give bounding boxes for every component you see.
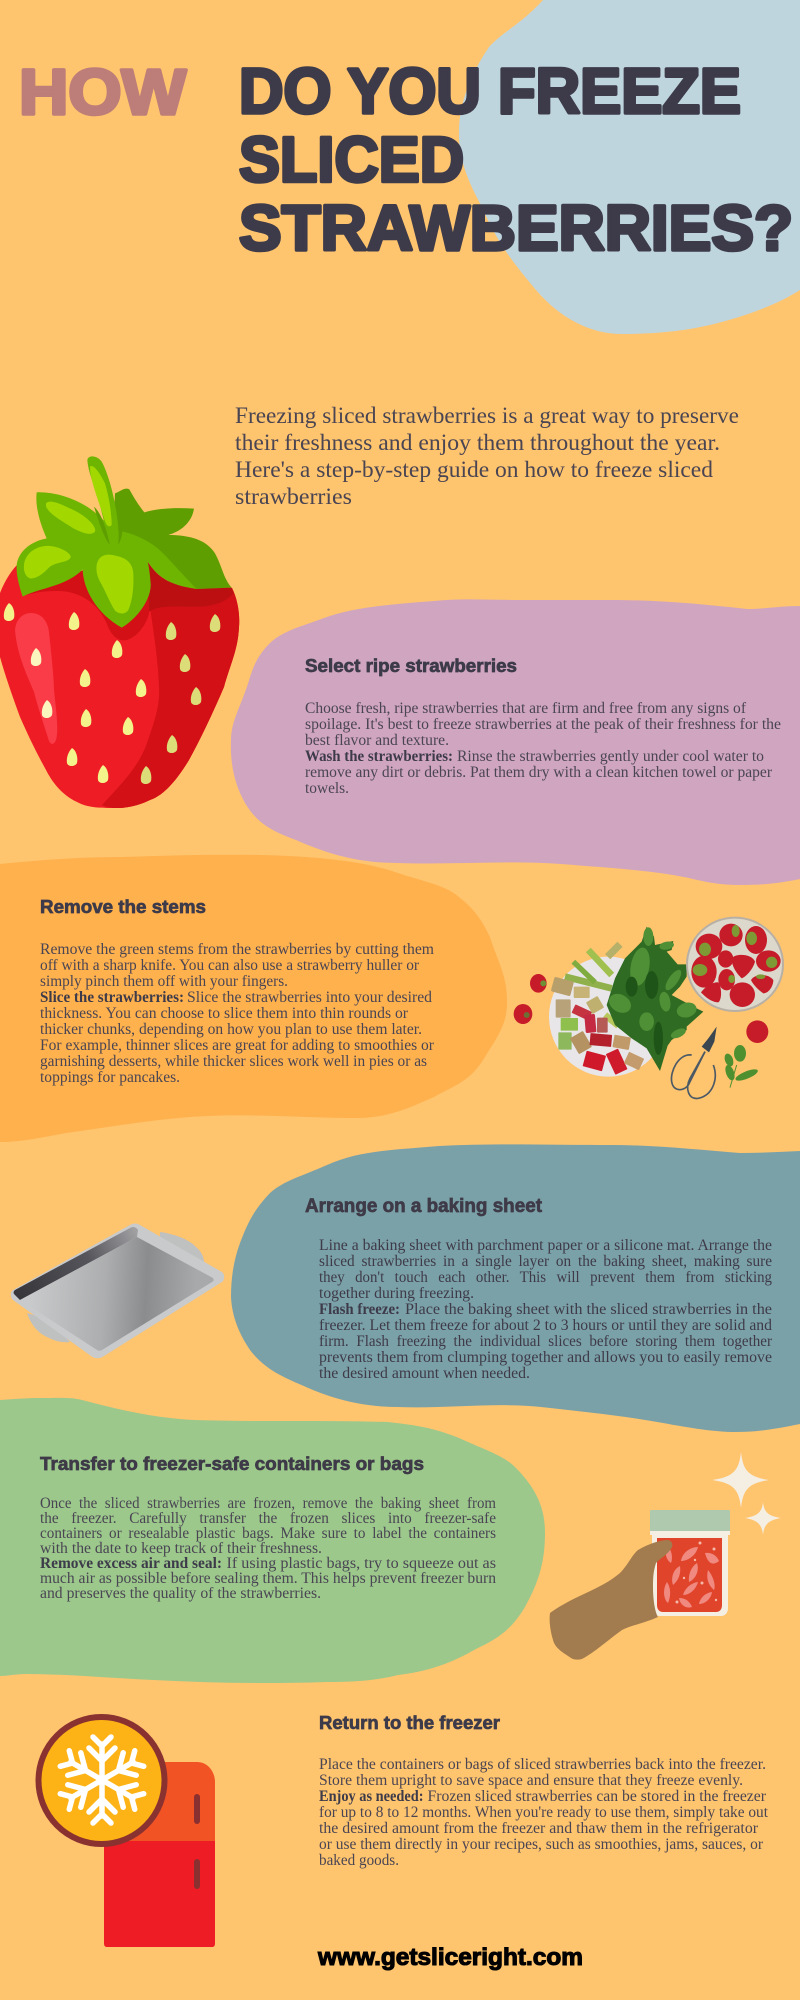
heading: remove the stems: Remove the stems [40, 896, 206, 917]
mint sprig [723, 1045, 759, 1088]
section: return to the freezer [319, 1712, 769, 1869]
intro text [235, 403, 739, 509]
jar lid [650, 1510, 730, 1532]
text block: arrange on a baking sheet: Place the baking sheet with the sliced strawberries in the [405, 1301, 772, 1318]
text block: return to the freezer: Store them upright to save space and ensure that they freeze evenly. [319, 1772, 743, 1789]
fridge handles [194, 1794, 200, 1889]
pan rim [11, 1224, 224, 1358]
text block: transfer to freezer-safe containers: and preserves the quality of the strawberries. [40, 1585, 321, 1602]
text block: transfer to freezer-safe containers: Remove excess air and seal: [40, 1555, 222, 1572]
text block: select ripe strawberries: spoilage. It's best to freeze strawberries at the peak of their freshness for the [305, 716, 781, 733]
shadow under calyx [23, 562, 233, 640]
snowflake badge [38, 1717, 164, 1844]
text block: arrange on a baking sheet: Line a baking sheet with parchment paper or a silicone mat. Arrange the [319, 1237, 772, 1254]
text block: transfer to freezer-safe containers: containers or resealable plastic bags. Make sure to label the containers [40, 1525, 496, 1542]
title: HOW [19, 56, 187, 128]
icon: fridge with snowflake badge [38, 1717, 215, 1947]
icon: baking sheet [11, 1224, 224, 1358]
pan floor [20, 1237, 214, 1351]
text block: transfer to freezer-safe containers [40, 1495, 496, 1602]
text block: transfer to freezer-safe containers: much air as possible before sealing them. This helps prevent freezer burn [40, 1570, 496, 1587]
text block: arrange on a baking sheet: together during freezing. [319, 1285, 474, 1302]
icon: strawberry [0, 456, 239, 808]
bowl [686, 917, 784, 1012]
rhubarb stalks [565, 944, 620, 1026]
text block: select ripe strawberries: best flavor and texture. [305, 732, 449, 749]
title: SLICED [239, 124, 464, 196]
panel: arrange on a baking sheet [231, 1144, 800, 1432]
panel: select ripe strawberries [231, 599, 800, 885]
text block: remove the stems: simply pinch them off with your fingers. [40, 973, 288, 990]
jam [657, 1538, 722, 1612]
text block: select ripe strawberries: Choose fresh, ripe strawberries that are firm and free from any signs of [305, 700, 747, 717]
text block: return to the freezer: Place the containers or bags of sliced strawberries back into the freezer. [319, 1756, 766, 1773]
fridge lower door [104, 1841, 215, 1947]
herb leaves [606, 927, 698, 1040]
text block: return to the freezer: for up to 8 to 12 months. When you're ready to use them, simply take out [319, 1804, 769, 1821]
text block: return to the freezer: Frozen sliced strawberries can be stored in the freezer [428, 1788, 767, 1805]
strawberries in bowl [691, 924, 781, 1007]
calyx leaves [17, 456, 232, 628]
text block: arrange on a baking sheet: prevents them from clumping together and allows you to easily remove [319, 1349, 772, 1366]
text block: arrange on a baking sheet: freezer. Let them freeze for about 2 to 3 hours or until they are solid and [319, 1317, 772, 1334]
text block: transfer to freezer-safe containers: If using plastic bags, try to squeeze out as [226, 1555, 496, 1572]
intro text: their freshness and enjoy them throughout the year. [235, 430, 720, 455]
text block: select ripe strawberries: Wash the strawberries: [305, 748, 453, 765]
text block: remove the stems: For example, thinner slices are great for adding to smoothies or [40, 1037, 435, 1054]
highlight [15, 613, 57, 744]
website url: www.getsliceright.com [317, 1944, 583, 1971]
text block: remove the stems: off with a sharp knife. You can also use a strawberry huller or [40, 957, 420, 974]
back wall [14, 1227, 138, 1300]
heading: return to the freezer: Return to the freezer [319, 1712, 500, 1733]
text block: return to the freezer: or use them directly in your recipes, such as smoothies, jams, sauces, or [319, 1836, 764, 1853]
text block: arrange on a baking sheet: sliced strawberries in a single layer on the baking sheet, making sure [319, 1253, 772, 1270]
text block: transfer to freezer-safe containers: with the date to keep track of their freshness. [40, 1540, 322, 1557]
strawberry calyxes [693, 925, 777, 983]
strawberry slices [664, 1545, 719, 1608]
title: DO YOU FREEZE [239, 55, 741, 127]
text block: remove the stems [40, 941, 435, 1086]
text block: return to the freezer [319, 1756, 769, 1869]
text block: return to the freezer: baked goods. [319, 1852, 399, 1869]
intro text: Freezing sliced strawberries is a great way to preserve [235, 403, 739, 428]
background blob: blue [459, 0, 800, 334]
herb bunch [607, 927, 703, 1071]
title: STRAWBERRIES? [239, 192, 793, 264]
text block: arrange on a baking sheet: Flash freeze: [319, 1301, 400, 1318]
heading: arrange on a baking sheet: Arrange on a baking sheet [305, 1195, 542, 1217]
berry body [0, 565, 239, 808]
title [19, 55, 793, 264]
text block: arrange on a baking sheet: the desired amount when needed. [319, 1365, 530, 1382]
text block: arrange on a baking sheet: firm. Flash freezing the individual slices before storing them together [319, 1333, 773, 1350]
text block: arrange on a baking sheet [319, 1237, 773, 1382]
hand [550, 1540, 672, 1660]
scissors [671, 1052, 715, 1098]
snowflake [58, 1737, 146, 1823]
text block: select ripe strawberries: Rinse the strawberries gently under cool water to [457, 748, 764, 765]
panel: transfer to freezer-safe containers [0, 1398, 545, 1683]
intro text: strawberries [235, 484, 352, 509]
intro text: Here's a step-by-step guide on how to freeze sliced [235, 457, 714, 482]
text block: remove the stems: garnishing desserts, while thicker slices work well in pies or as [40, 1053, 427, 1070]
text block: return to the freezer: Enjoy as needed: [319, 1788, 424, 1805]
text block: remove the stems: toppings for pancakes. [40, 1069, 180, 1086]
text block: arrange on a baking sheet: they don't touch each other. This will prevent them from sticking [319, 1269, 772, 1286]
fridge upper door [104, 1762, 215, 1841]
text block: select ripe strawberries: towels. [305, 780, 349, 797]
loose strawberries [514, 974, 768, 1043]
heading: select ripe strawberries: Select ripe strawberries [305, 655, 517, 676]
illustration: rhubarb plate, herbs and bowl of strawberries [514, 917, 784, 1098]
jam speckles [676, 1542, 717, 1604]
text block: transfer to freezer-safe containers: the freezer. Carefully transfer the frozen slices into freezer-safe [40, 1510, 496, 1527]
text block: remove the stems: Slice the strawberries into your desired [187, 989, 432, 1006]
berry shaded side [102, 588, 239, 808]
text block: select ripe strawberries [305, 700, 781, 797]
panel: remove the stems [0, 855, 507, 1142]
pan handles [160, 1232, 204, 1262]
text block: remove the stems: thicker chunks, depending on how you plan to use them later. [40, 1021, 422, 1038]
icon: hand holding jar of strawberries [550, 1510, 730, 1660]
heading: transfer to freezer-safe containers: Transfer to freezer-safe containers or bags [40, 1453, 424, 1474]
plate [549, 957, 668, 1077]
seeds [4, 603, 220, 784]
text block: return to the freezer: the desired amount from the freezer and thaw them in the refrigerator [319, 1820, 759, 1837]
text block: remove the stems: thickness. You can choose to slice them into thin rounds or [40, 1005, 409, 1022]
rhubarb chunks [551, 977, 644, 1075]
text block: remove the stems: Remove the green stems from the strawberries by cutting them [40, 941, 434, 958]
icon: sparkles [712, 1452, 781, 1535]
jar body [650, 1531, 730, 1616]
text block: select ripe strawberries: remove any dirt or debris. Pat them dry with a clean kitchen towel or paper [305, 764, 773, 781]
text block: transfer to freezer-safe containers: Once the sliced strawberries are frozen, remove the baking sheet from [40, 1495, 496, 1512]
text block: remove the stems: Slice the strawberries: [40, 989, 184, 1006]
